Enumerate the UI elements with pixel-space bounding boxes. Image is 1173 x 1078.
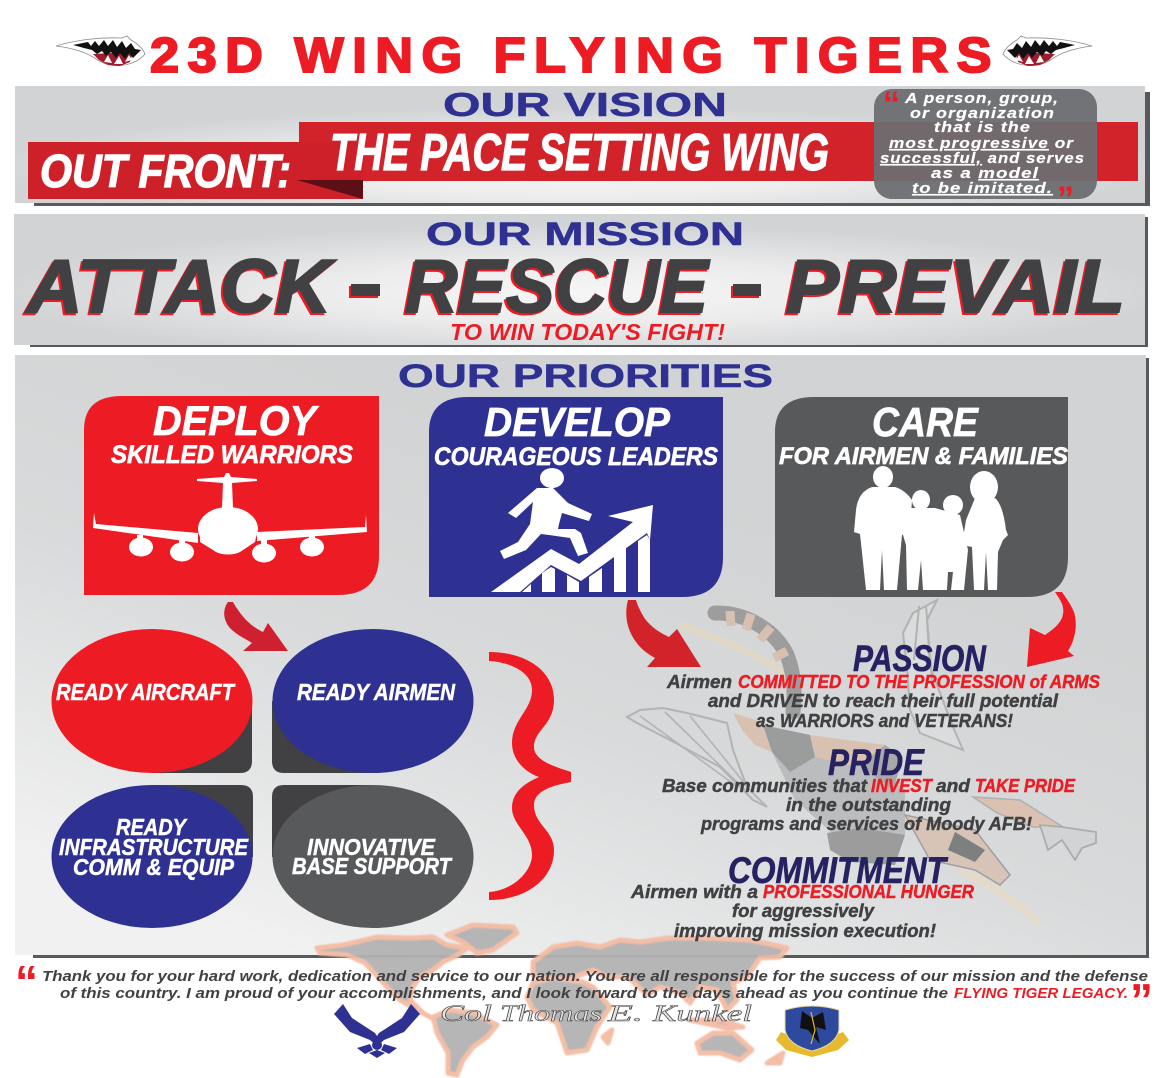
readiness: ready infrastructure: READY: [116, 814, 188, 840]
mission words: PREVAIL: [786, 244, 1125, 328]
callout: definition: to be imitated.: [912, 180, 1053, 197]
block: passion: PASSION: [853, 638, 987, 679]
mission words: [25, 244, 1125, 328]
panel: vision: [15, 85, 1150, 218]
block: pride: programs and services of Moody AFB!: [700, 814, 1032, 834]
card subheading: FOR AIRMEN & FAMILIES: [779, 443, 1068, 470]
readiness: innovative base support: BASE SUPPORT: [292, 853, 453, 879]
block: commitment: improving mission execution!: [674, 921, 936, 941]
icon: air force symbol: [334, 1004, 420, 1058]
ribbon: lower: [28, 142, 363, 199]
block: pride: INVEST: [871, 776, 934, 796]
card subheading: SKILLED WARRIORS: [111, 441, 353, 469]
heading: our mission: OUR MISSION: [426, 216, 744, 252]
watermark: flying tiger: [627, 600, 1096, 925]
closing quote: Thank you for your hard work, dedication and service to our nation. You are all responsible for the success of our mission and the defense: [42, 968, 1148, 985]
block: pride: Base communities that: [662, 776, 868, 796]
mission words shadow: PREVAIL: [784, 246, 1123, 330]
brace: [489, 652, 571, 900]
heading: our priorities: OUR PRIORITIES: [398, 358, 773, 394]
readiness: ready aircraft: READY AIRCRAFT: [56, 679, 236, 705]
readiness: ready aircraft: [52, 629, 252, 773]
signature: [440, 1001, 752, 1026]
arrow: care to passion: [1027, 592, 1076, 667]
heading: our vision: OUR VISION: [443, 86, 727, 123]
block: commitment: [630, 850, 974, 941]
mission words: ATTACK: [25, 244, 336, 328]
callout: definition: “: [883, 85, 900, 123]
icon: left shark mouth: [56, 36, 145, 66]
callout: definition: as a model: [931, 165, 1039, 182]
callout: definition: successful, and serves: [880, 150, 1085, 167]
signature: E.: [606, 1001, 643, 1026]
callout: definition: ”: [1057, 180, 1074, 218]
callout: definition: most progressive or: [889, 135, 1074, 152]
icon: runner on rising chart: [491, 468, 653, 592]
readiness: innovative base support: [272, 785, 474, 928]
block: commitment: PROFESSIONAL HUNGER: [763, 882, 974, 902]
card heading: DEVELOP: [484, 399, 671, 445]
block: pride: in the outstanding: [786, 795, 951, 815]
closing quote: FLYING TIGER LEGACY.: [954, 985, 1128, 1002]
readiness: ready infrastructure: [52, 785, 253, 928]
block: pride: TAKE PRIDE: [975, 776, 1076, 796]
signature: Kunkel: [651, 1001, 752, 1026]
card: care: [775, 397, 1068, 597]
panel: mission: [14, 214, 1148, 347]
ribbon text: the pace setting wing: THE PACE SETTING WING: [330, 124, 829, 182]
readiness: ready infrastructure: COMM & EQUIP: [73, 854, 235, 880]
mission words shadow: ATTACK: [23, 246, 334, 330]
signature: Thomas: [500, 1001, 602, 1026]
mission words shadow: [23, 246, 1123, 330]
card heading: DEPLOY: [153, 397, 320, 444]
block: passion: and DRIVEN to reach their full potential: [708, 691, 1059, 711]
card: develop: [429, 397, 723, 597]
block: pride: [662, 742, 1076, 834]
closing quote: [15, 956, 1153, 1026]
closing quote: ”: [1130, 974, 1153, 1026]
icon: right shark mouth: [1003, 36, 1092, 66]
block: commitment: COMMITMENT: [728, 850, 949, 891]
callout: definition: [874, 85, 1097, 218]
block: passion: Airmen: [666, 672, 732, 692]
callout: definition: A person, group,: [904, 90, 1059, 107]
signature: Col: [440, 1001, 492, 1026]
readiness: ready airmen: READY AIRMEN: [297, 679, 455, 705]
mission words: RESCUE: [405, 244, 710, 328]
block: pride: and: [936, 776, 971, 796]
icon: family: [854, 466, 1008, 590]
icon: airplane: [93, 473, 367, 562]
arrow: develop to passion: [626, 600, 701, 667]
ribbon: upper: [299, 122, 1138, 181]
closing quote: of this country. I am proud of your accomplishments, and I look forward to the days ahead as you continue the: [60, 985, 948, 1002]
block: passion: COMMITTED TO THE PROFESSION of ARMS: [738, 672, 1100, 692]
mission words shadow: RESCUE: [403, 246, 708, 330]
tagline: TO WIN TODAY'S FIGHT!: [450, 319, 725, 345]
watermark: world map: [317, 925, 787, 1075]
icon: wing shield: [776, 1006, 849, 1057]
card subheading: COURAGEOUS LEADERS: [434, 443, 718, 471]
block: pride: PRIDE: [828, 742, 925, 783]
title: 23D WING FLYING TIGERS: [150, 29, 1000, 83]
readiness: ready airmen: [272, 629, 474, 773]
readiness: ready infrastructure: INFRASTRUCTURE: [59, 834, 249, 860]
block: passion: as WARRIORS and VETERANS!: [756, 711, 1013, 731]
closing quote: “: [15, 956, 38, 1008]
callout: definition: that is the: [934, 119, 1031, 136]
ribbon text: out front: OUT FRONT:: [40, 145, 291, 197]
block: commitment: Airmen with a: [630, 882, 758, 902]
callout: definition: or organization: [910, 105, 1055, 122]
arrow: deploy to readiness: [224, 602, 288, 651]
card heading: CARE: [872, 399, 979, 445]
ribbon fold: [297, 180, 363, 199]
card: deploy: [84, 396, 379, 595]
readiness: innovative base support: INNOVATIVE: [307, 834, 436, 860]
block: passion: [666, 638, 1100, 731]
block: commitment: for aggressively: [732, 901, 875, 921]
